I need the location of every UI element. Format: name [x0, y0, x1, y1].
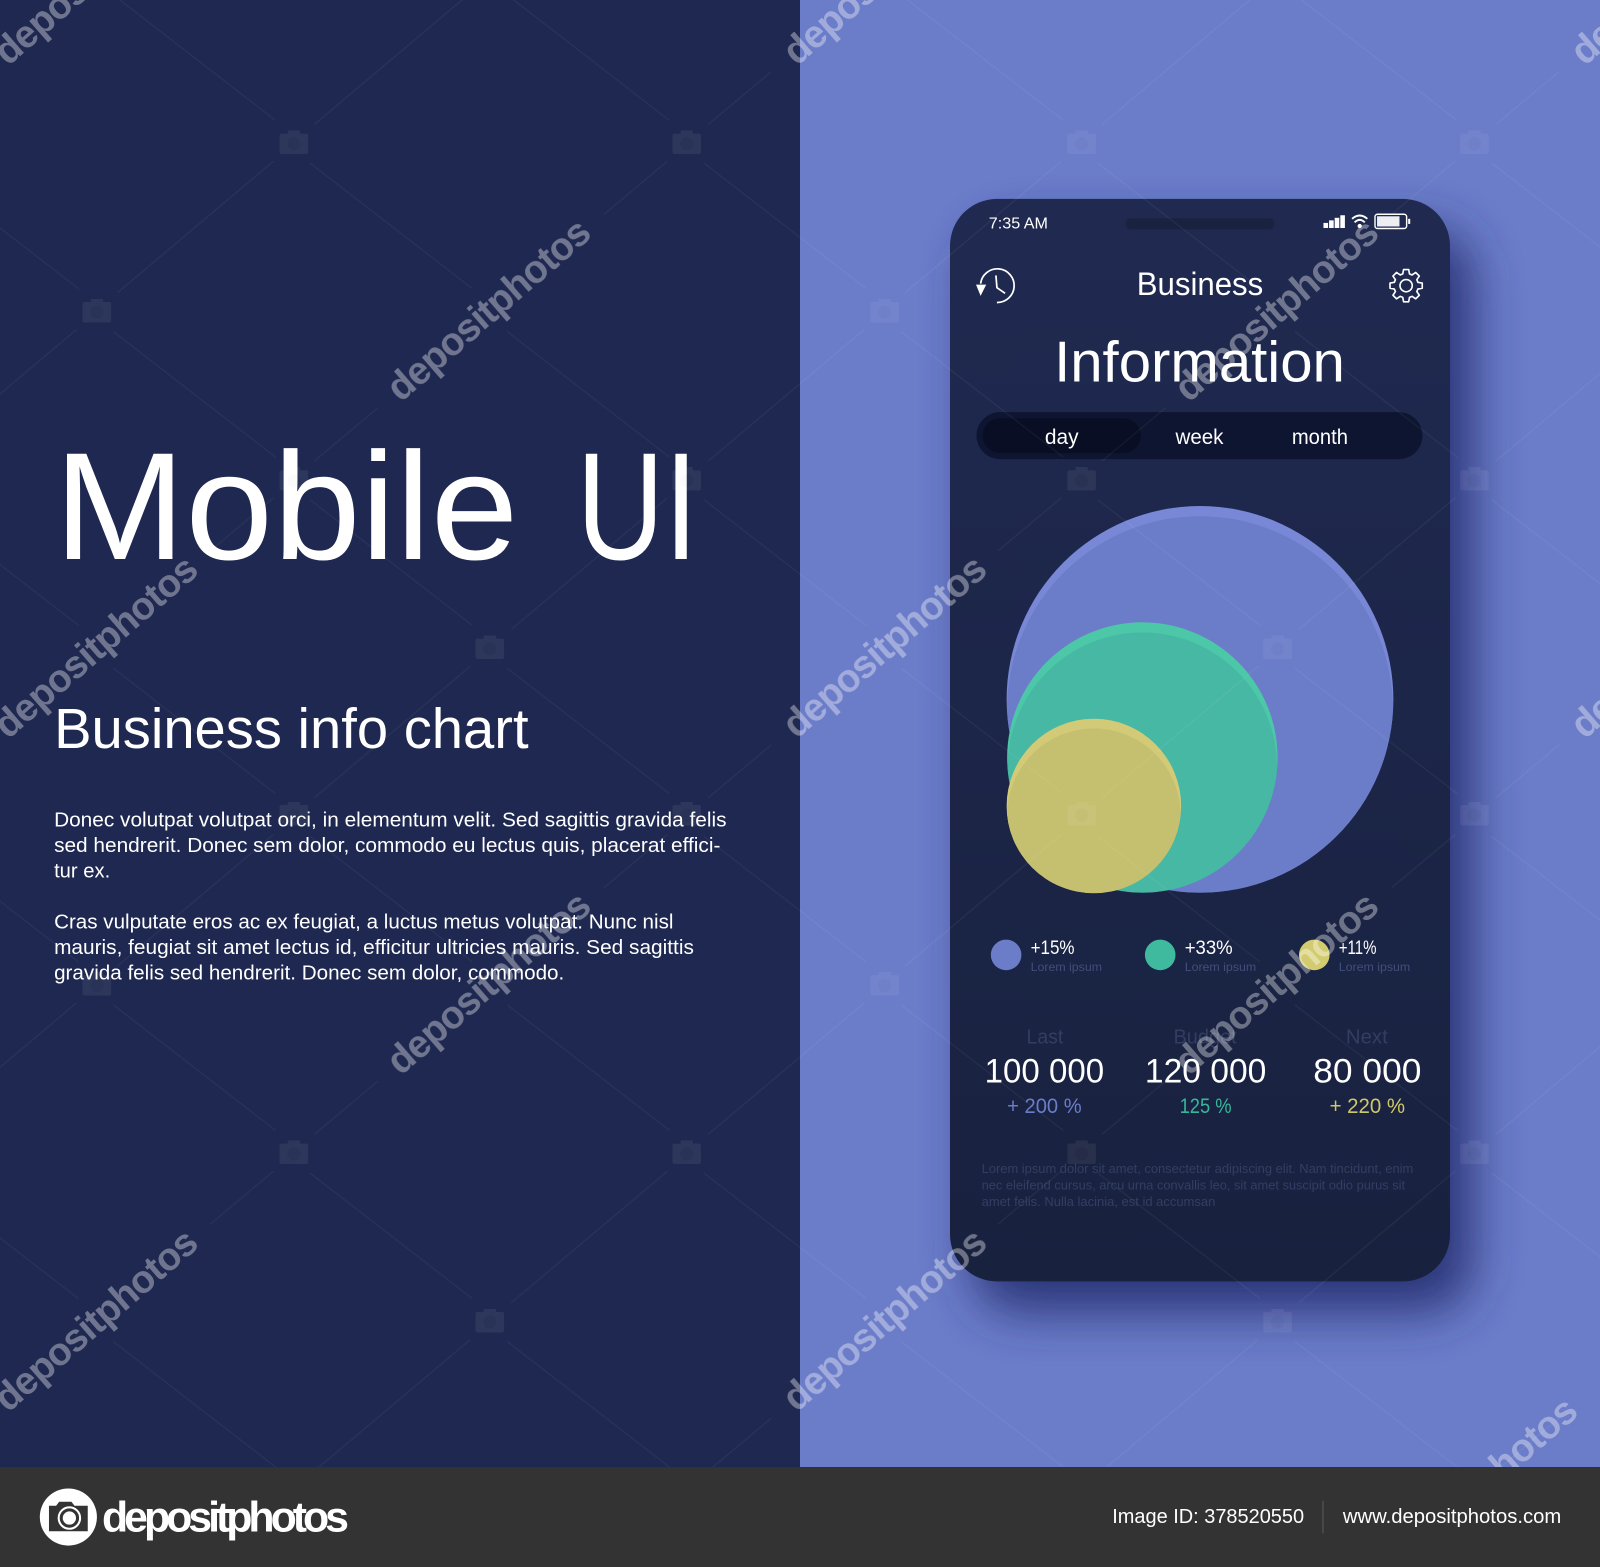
stat: Last: 100 000 — [985, 1052, 1104, 1090]
status bar time: 7:35 AM — [989, 216, 1048, 233]
stat: Next: + 220 % — [1330, 1094, 1405, 1118]
tab: day: day — [1045, 425, 1079, 449]
active tab pill — [983, 418, 1141, 453]
circle: blue — [1007, 506, 1393, 902]
period tabs — [977, 412, 1422, 459]
circle: yellow — [1007, 719, 1181, 902]
title: Mobile UI: Mobile — [54, 421, 518, 592]
text block: first paragraph: Donec volutpat volutpat orci, in elementum velit. Sed sagittis gravida felis — [54, 809, 727, 831]
tab bar track — [977, 412, 1422, 459]
watermark: depositphotos words: depositphotos — [379, 884, 599, 1083]
text block: second paragraph — [54, 911, 694, 984]
title: Mobile UI: UI — [577, 421, 698, 592]
phone drop shadow — [972, 230, 1472, 1312]
legend item: +15% — [991, 937, 1102, 974]
heading: Business: Business — [1137, 265, 1263, 302]
watermark: depositphotos words: depositphotos — [379, 210, 599, 410]
panel: phone — [950, 199, 1450, 1281]
legend item: +33% — [1145, 937, 1256, 974]
icon: signal bars — [1323, 215, 1345, 228]
icon: wifi — [1352, 216, 1367, 227]
panel: right blue background — [800, 0, 1600, 1467]
legend item: +11% — [1299, 937, 1410, 974]
subtitle: Business info chart: Business info chart — [54, 697, 529, 760]
legend item: +33%: +33% — [1185, 937, 1233, 959]
text block: second paragraph: gravida felis sed hendrerit. Donec sem dolor, commodo. — [54, 962, 564, 984]
legend item: +15%: +15% — [1031, 937, 1074, 959]
text block: first paragraph: sed hendrerit. Donec sem dolor, commodo eu lectus quis, placerat effici- — [54, 835, 720, 857]
tab: month: month — [1292, 425, 1348, 449]
icon: camera logo — [40, 1488, 97, 1546]
stat: Budget: 120 000 — [1145, 1052, 1266, 1090]
text block: phone footnote — [982, 1161, 1413, 1209]
text block: phone footnote: nec eleifend cursus, arcu urna convallis leo, sit amet suscipit odio purus sit — [982, 1178, 1406, 1193]
stat: Budget: 125 % — [1180, 1094, 1232, 1118]
panel: left navy background — [0, 0, 800, 1467]
phone body — [950, 199, 1450, 1281]
image id: Image ID: 378520550 — [1112, 1506, 1304, 1528]
circle: green — [1007, 622, 1278, 902]
watermark: depositphotos words: depositphotos — [1166, 210, 1387, 410]
stat: Last: Last — [1027, 1027, 1064, 1049]
tab: week: week — [1175, 425, 1224, 449]
text block: phone footnote: amet felis. Nulla lacinia, est id accumsan — [982, 1194, 1215, 1209]
legend item: +11%: +11% — [1339, 937, 1377, 959]
text block: first paragraph: tur ex. — [54, 860, 110, 882]
logo wordmark: depositphotos — [102, 1493, 349, 1541]
website url: www.depositphotos.com — [1342, 1506, 1561, 1528]
legend item: +33%: Lorem ipsum — [1185, 960, 1256, 974]
panel: footer bar — [0, 1467, 1600, 1567]
icon: history clock — [976, 269, 1014, 302]
icon: battery — [1375, 214, 1410, 229]
footer background — [0, 1467, 1600, 1567]
stat: Next — [1313, 1027, 1421, 1118]
stat: Budget — [1145, 1027, 1266, 1118]
phone speaker notch — [1126, 218, 1274, 230]
text block: second paragraph: mauris, feugiat sit amet lectus id, efficitur ultricies mauris. Sed sagittis — [54, 937, 694, 959]
text block: second paragraph: Cras vulputate eros ac ex feugiat, a luctus metus volutpat. Nunc nisl — [54, 911, 673, 933]
icon: settings gear — [1390, 270, 1422, 302]
stat: Next: 80 000 — [1313, 1052, 1421, 1090]
watermark: depositphotos words: depositphotos — [775, 1220, 995, 1420]
heading: Information: Information — [1054, 331, 1345, 395]
watermark: depositphotos words: depositphotos — [1166, 884, 1387, 1083]
text block: first paragraph — [54, 809, 727, 882]
stat: Next: Next — [1346, 1027, 1388, 1049]
stat: Budget: Budget — [1173, 1027, 1237, 1049]
watermark: camera icons — [83, 131, 1489, 1332]
stat: Last: + 200 % — [1007, 1094, 1082, 1118]
legend item: +11%: Lorem ipsum — [1339, 960, 1410, 974]
watermark: depositphotos words: depositphotos — [775, 547, 995, 747]
stat: Last — [985, 1027, 1104, 1118]
chart: nested circles — [1007, 506, 1393, 902]
legend item: +15%: Lorem ipsum — [1031, 960, 1102, 974]
text block: phone footnote: Lorem ipsum dolor sit amet, consectetur adipiscing elit. Nam tincidunt, enim — [982, 1161, 1413, 1176]
